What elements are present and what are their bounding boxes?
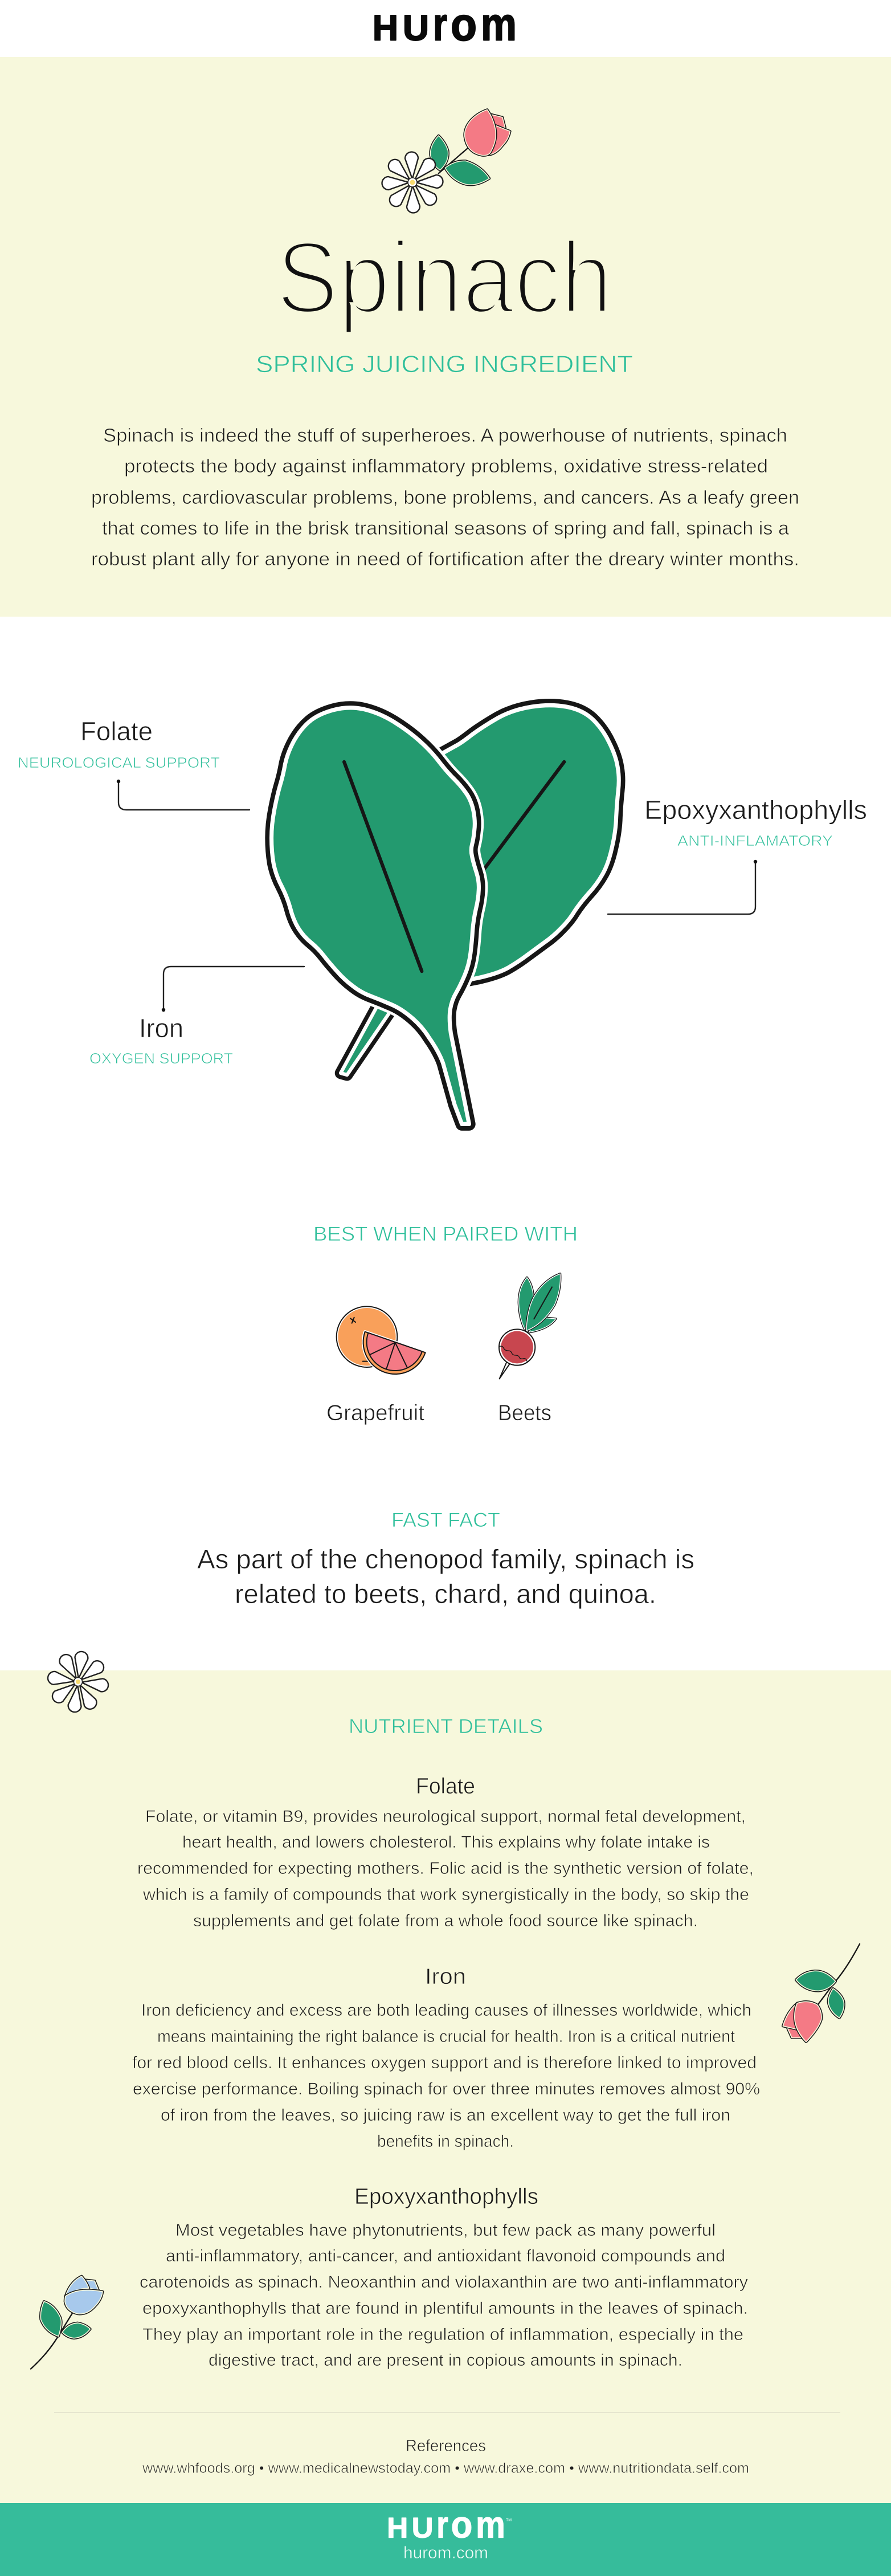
heading: BEST WHEN PAIRED WITH: [313, 1223, 578, 1245]
intro text block: protects the body against inflammatory problems, oxidative stress-related: [124, 455, 768, 476]
fact text: related to beets, chard, and quinoa.: [235, 1579, 656, 1609]
logo: Hurom footer: o: [451, 2504, 472, 2546]
fact text: As part of the chenopod family, spinach is: [197, 1544, 694, 1574]
logo: Hurom header: U: [403, 8, 429, 48]
icon: grapefruit: [337, 1306, 426, 1374]
logo: Hurom footer: r: [436, 2504, 448, 2546]
intro text block: robust plant ally for anyone in need of fortification after the dreary winter months.: [91, 548, 799, 569]
text block: iron: [132, 1964, 760, 2151]
section: fast fact: [197, 1509, 694, 1609]
icon: daisy: [47, 1650, 109, 1713]
logo: Hurom footer: m: [476, 2504, 505, 2546]
references: [142, 2437, 749, 2476]
text block: epoxyxanthophylls: anti-inflammatory, anti-cancer, and antioxidant flavonoid compounds and: [166, 2247, 725, 2265]
logo: Hurom footer: U: [412, 2512, 433, 2544]
callout: epoxyxanthophylls: Epoxyxanthophylls: [644, 795, 867, 825]
label: beets: Beets: [498, 1401, 551, 1425]
text block: iron: exercise performance. Boiling spinach for over three minutes removes almost 90%: [133, 2080, 760, 2098]
intro text block: Spinach is indeed the stuff of superheroes. A powerhouse of nutrients, spinach: [103, 425, 787, 446]
title: Spinach: [276, 221, 612, 335]
text block: epoxyxanthophylls: epoxyxanthophylls that are found in plentiful amounts in the leaves of spinach.: [142, 2299, 748, 2318]
callout: folate: [18, 716, 250, 810]
illustration: spinach leaves: [272, 706, 619, 1124]
logo: Hurom header: r: [433, 0, 447, 50]
icon: beet: [499, 1274, 560, 1379]
text block: folate: Folate, or vitamin B9, provides neurological support, normal fetal development,: [145, 1807, 746, 1826]
text block: iron: benefits in spinach.: [377, 2132, 514, 2151]
text block: iron: Iron: [425, 1964, 466, 1989]
icon: blue tulip: [31, 2276, 103, 2369]
text block: folate: which is a family of compounds that work synergistically in the body, so skip the: [142, 1885, 749, 1904]
panel: intro: [0, 57, 891, 617]
callout: epoxyxanthophylls: [608, 795, 867, 914]
references: www.whfoods.org • www.medicalnewstoday.com • www.draxe.com • www.nutritiondata.self.com: [142, 2460, 749, 2476]
references: References: [406, 2437, 486, 2455]
subtitle: SPRING JUICING INGREDIENT: [256, 350, 633, 377]
text block: epoxyxanthophylls: Epoxyxanthophylls: [354, 2184, 538, 2209]
footer: [0, 2503, 891, 2576]
text block: folate: heart health, and lowers cholesterol. This explains why folate intake is: [182, 1833, 710, 1852]
text block: folate: supplements and get folate from a whole food source like spinach.: [193, 1911, 698, 1930]
logo: Hurom header: [373, 0, 517, 50]
text block: epoxyxanthophylls: digestive tract, and are present in copious amounts in spinach.: [209, 2351, 682, 2370]
text block: iron: of iron from the leaves, so juicing raw is an excellent way to get the full iron: [161, 2106, 730, 2125]
text block: epoxyxanthophylls: carotenoids as spinach. Neoxanthin and violaxanthin are two anti-inflammatory: [140, 2273, 748, 2292]
callout: iron: Iron: [139, 1013, 183, 1043]
text block: folate: [137, 1774, 754, 1930]
icon: daisy and pink tulip: [382, 109, 510, 213]
text block: epoxyxanthophylls: Most vegetables have phytonutrients, but few pack as many powerful: [175, 2221, 716, 2240]
text block: folate: Folate: [416, 1774, 475, 1799]
trademark: TM: [506, 2518, 512, 2522]
logo: Hurom header: m: [481, 0, 517, 50]
text block: iron: means maintaining the right balance is crucial for health. Iron is a critical nutrient: [157, 2027, 735, 2046]
section: best when paired with: [313, 1223, 578, 1425]
text block: epoxyxanthophylls: They play an important role in the regulation of inflammation, especially in the: [142, 2325, 743, 2344]
logo: Hurom footer: [387, 2504, 505, 2546]
callout: folate: NEUROLOGICAL SUPPORT: [18, 754, 220, 771]
website: hurom.com: [403, 2544, 488, 2562]
intro text block: that comes to life in the brisk transitional seasons of spring and fall, spinach is a: [102, 517, 790, 539]
label: grapefruit: Grapefruit: [326, 1401, 424, 1425]
logo: Hurom footer: H: [387, 2512, 408, 2544]
intro text block: [91, 425, 799, 569]
text block: iron: Iron deficiency and excess are both leading causes of illnesses worldwide, which: [141, 2001, 751, 2020]
callout: iron: [89, 967, 304, 1067]
text block: iron: for red blood cells. It enhances oxygen support and is therefore linked to improved: [132, 2053, 757, 2072]
icon: pink tulip: [783, 1944, 860, 2042]
text block: folate: recommended for expecting mothers. Folic acid is the synthetic version of folate,: [137, 1859, 754, 1878]
callout: epoxyxanthophylls: ANTI-INFLAMATORY: [677, 832, 833, 849]
fact text: [197, 1544, 694, 1609]
heading: FAST FACT: [391, 1509, 500, 1531]
callout: iron: OXYGEN SUPPORT: [89, 1050, 233, 1067]
callout: folate: Folate: [80, 716, 153, 746]
intro text block: problems, cardiovascular problems, bone problems, and cancers. As a leafy green: [91, 487, 799, 508]
heading: NUTRIENT DETAILS: [349, 1715, 543, 1738]
panel: nutrient details: [0, 1650, 891, 2503]
logo: Hurom header: H: [373, 8, 398, 48]
logo: Hurom header: o: [451, 0, 477, 50]
text block: epoxyxanthophylls: [140, 2184, 748, 2370]
